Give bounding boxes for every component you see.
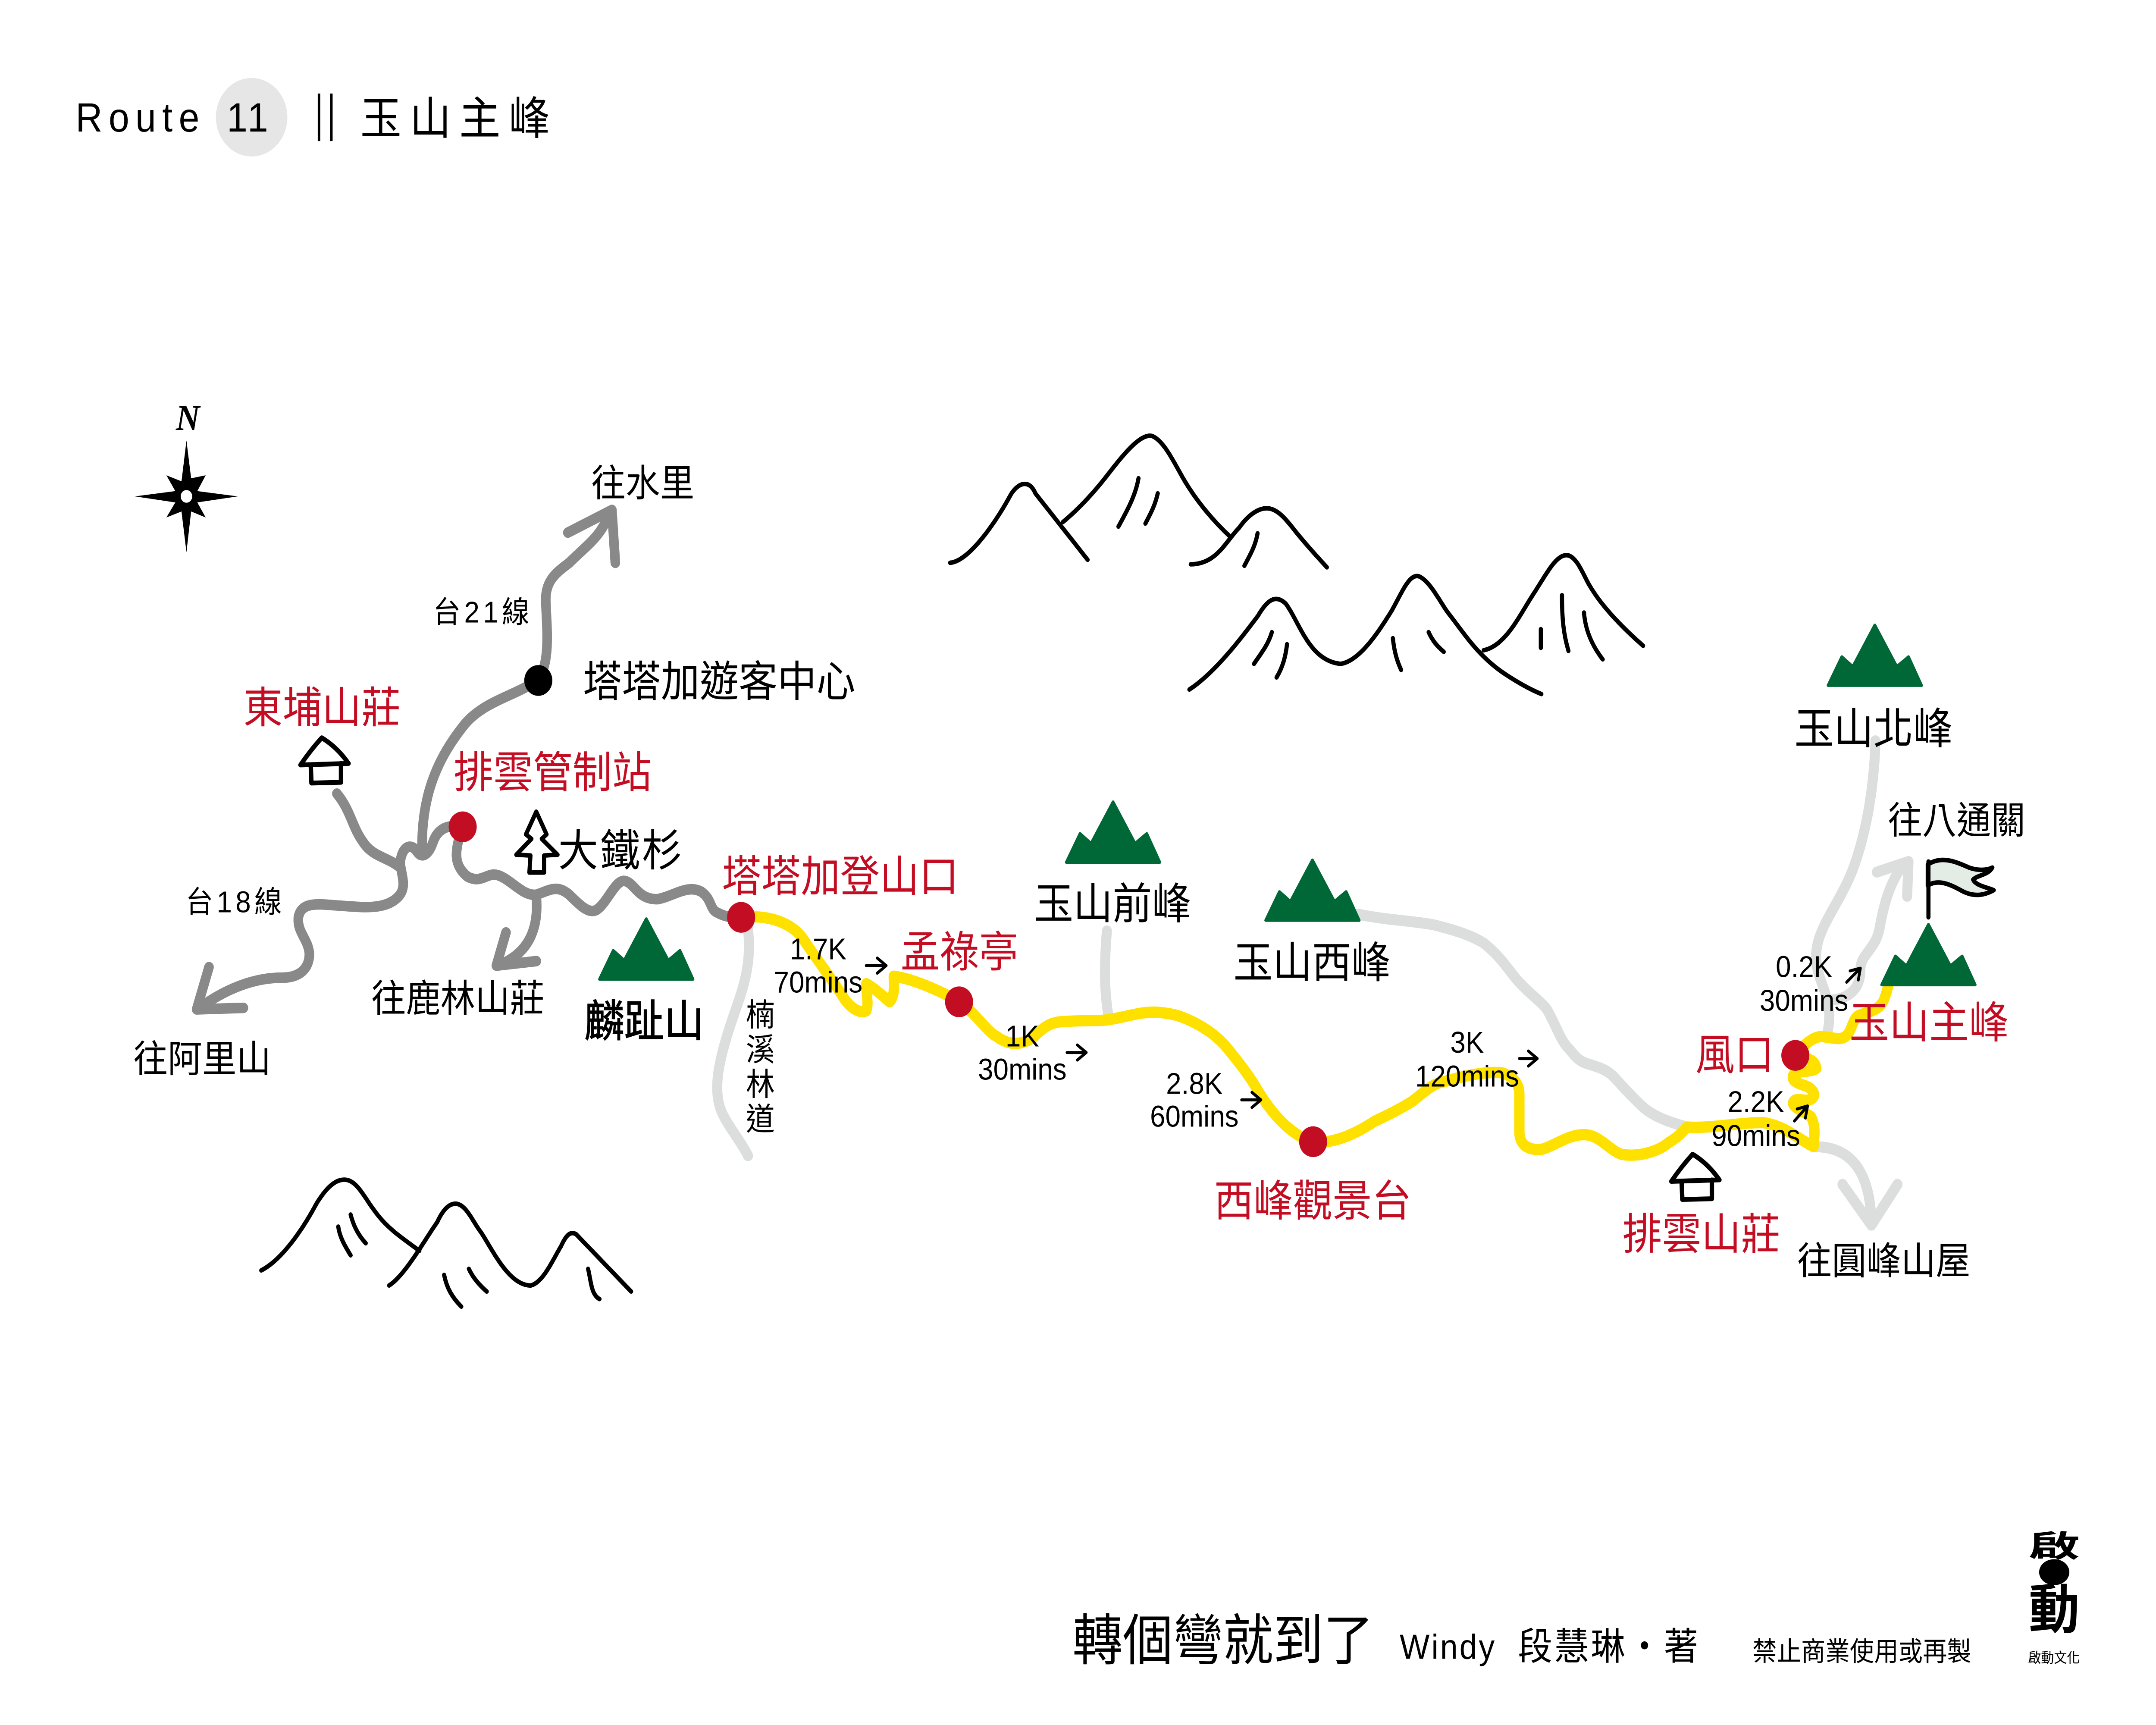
logo: publisher — [2028, 1529, 2080, 1666]
label: 玉山前峰: 玉山前峰 — [1034, 880, 1191, 928]
icon: hut 排雲山莊 — [1671, 1154, 1720, 1199]
title: Route 11 玉山主峰: 11 — [227, 95, 268, 141]
segment: 2.8K 60mins — [1150, 1067, 1261, 1133]
title: Route 11 玉山主峰 — [75, 78, 550, 157]
marker: 排雲管制站 — [448, 812, 477, 842]
trail: 楠溪林道 — [717, 920, 749, 1156]
icon: flag — [1928, 860, 1994, 917]
icon: compass: N — [175, 398, 201, 438]
icon: compass — [135, 398, 238, 552]
icon: green peak 玉山前峰 — [1066, 802, 1160, 862]
author: Windy — [1400, 1628, 1495, 1667]
label: 楠溪林道 vertical: 道 — [746, 1101, 775, 1137]
road: spur to 往鹿林山莊 — [496, 896, 537, 966]
main route: 風口 to summit — [1796, 981, 1889, 1055]
segment: 1.7K 70mins: 1.7K — [790, 932, 846, 966]
logo: publisher: 動 — [2029, 1580, 2080, 1640]
label: 東埔山莊: 東埔山莊 — [243, 684, 401, 732]
label: 西峰觀景台: 西峰觀景台 — [1214, 1177, 1411, 1226]
label: 玉山北峰: 玉山北峰 — [1794, 705, 1953, 753]
segment: 1K 30mins — [978, 1019, 1086, 1086]
segment: 1K 30mins: 1K — [1006, 1019, 1039, 1053]
segment: 2.2K 90mins: 90mins — [1711, 1119, 1800, 1153]
trail: 往八通關 with arrow — [1830, 862, 1908, 1000]
label: 大鐵杉: 大鐵杉 — [558, 826, 682, 875]
label: 麟趾山: 麟趾山 — [584, 997, 704, 1046]
segment: 1.7K 70mins — [774, 932, 886, 999]
label: 楠溪林道 vertical — [746, 997, 775, 1137]
logo: publisher: 啟動文化 — [2028, 1650, 2080, 1666]
segment: 0.2K 30mins: 0.2K — [1776, 950, 1832, 984]
author — [1400, 1625, 1698, 1668]
segment: 3K 120mins: 3K — [1450, 1026, 1484, 1060]
mountains: upper sketch group one — [950, 436, 1327, 567]
main route: trailhead to 西峰觀景台 — [741, 917, 1313, 1142]
label: 往阿里山: 往阿里山 — [133, 1038, 271, 1080]
segment: 0.2K 30mins: 30mins — [1760, 984, 1848, 1018]
icon: green peak 玉山北峰 — [1828, 625, 1921, 685]
segment: 2.2K 90mins: 2.2K — [1727, 1085, 1784, 1119]
label: 往圓峰山屋: 往圓峰山屋 — [1797, 1240, 1970, 1282]
label: 楠溪林道 vertical: 楠 — [746, 997, 775, 1033]
title: Route 11 玉山主峰: Route — [75, 95, 199, 141]
road: Route 21 north with arrow — [422, 510, 615, 854]
icon: tree 大鐵杉 — [516, 812, 558, 872]
label: 玉山西峰: 玉山西峰 — [1233, 939, 1391, 987]
label: 往水里: 往水里 — [591, 462, 694, 505]
icon: green peak 麟趾山 — [599, 919, 693, 979]
road: Route 18 with arrow — [197, 826, 462, 1010]
marker: 塔塔加遊客中心 — [524, 665, 552, 696]
segment: 2.2K 90mins — [1711, 1085, 1808, 1153]
label: 塔塔加登山口: 塔塔加登山口 — [722, 853, 959, 901]
marker: 風口 — [1781, 1040, 1809, 1071]
segment: 3K 120mins — [1415, 1026, 1537, 1093]
road: 排雲管制站 to trailhead — [457, 827, 740, 917]
segment: 0.2K 30mins — [1760, 950, 1860, 1018]
label: 台18線: 台18線 — [185, 885, 282, 919]
label: 塔塔加遊客中心: 塔塔加遊客中心 — [583, 658, 856, 706]
label: 台21線: 台21線 — [433, 596, 530, 629]
label: 孟祿亭: 孟祿亭 — [901, 929, 1018, 977]
marker: 塔塔加登山口 — [727, 902, 755, 933]
segment: 1K 30mins: 30mins — [978, 1053, 1067, 1086]
author: 段慧琳・著 — [1518, 1625, 1698, 1668]
trail: 玉山前峰 spur — [1105, 931, 1108, 1016]
trail: 玉山西峰 to 排雲山莊 — [1359, 914, 1687, 1127]
segment: 2.8K 60mins: 60mins — [1150, 1100, 1239, 1133]
main route: 西峰觀景台 to 風口 — [1313, 1055, 1816, 1155]
logo: publisher: 啟 — [2029, 1529, 2080, 1564]
icon: green peak 玉山西峰 — [1266, 860, 1359, 920]
segment: 2.8K 60mins: 2.8K — [1166, 1067, 1222, 1101]
icon: green peak 玉山主峰 — [1882, 925, 1975, 985]
trail: 玉山北峰 — [1816, 741, 1875, 1034]
label: 排雲管制站: 排雲管制站 — [454, 749, 652, 797]
segment: 3K 120mins: 120mins — [1415, 1060, 1519, 1093]
label: 往八通關: 往八通關 — [1888, 800, 2025, 842]
segment: 1.7K 70mins: 70mins — [774, 966, 862, 999]
mountains: lower left sketch group — [261, 1180, 631, 1307]
trail: 往圓峰山屋 with arrow — [1815, 1147, 1898, 1225]
marker: 孟祿亭 — [945, 986, 973, 1017]
notice: no commercial use: 禁止商業使用或再製 — [1752, 1637, 1971, 1667]
icon: hut 東埔山莊 — [301, 738, 348, 783]
mountains: upper sketch group two — [1189, 555, 1643, 694]
label: 楠溪林道 vertical: 林 — [746, 1066, 775, 1102]
label: 往鹿林山莊: 往鹿林山莊 — [371, 977, 545, 1020]
marker: 西峰觀景台 — [1299, 1126, 1327, 1157]
road: spur to 東埔山莊 — [337, 794, 400, 868]
label: 排雲山莊: 排雲山莊 — [1623, 1211, 1780, 1259]
title: Route 11 玉山主峰: 玉山主峰 — [360, 94, 550, 144]
label: 玉山主峰: 玉山主峰 — [1849, 998, 2009, 1048]
book title: 轉個彎就到了 — [1072, 1609, 1373, 1672]
label: 楠溪林道 vertical: 溪 — [746, 1032, 775, 1067]
label: 風口: 風口 — [1695, 1031, 1774, 1079]
